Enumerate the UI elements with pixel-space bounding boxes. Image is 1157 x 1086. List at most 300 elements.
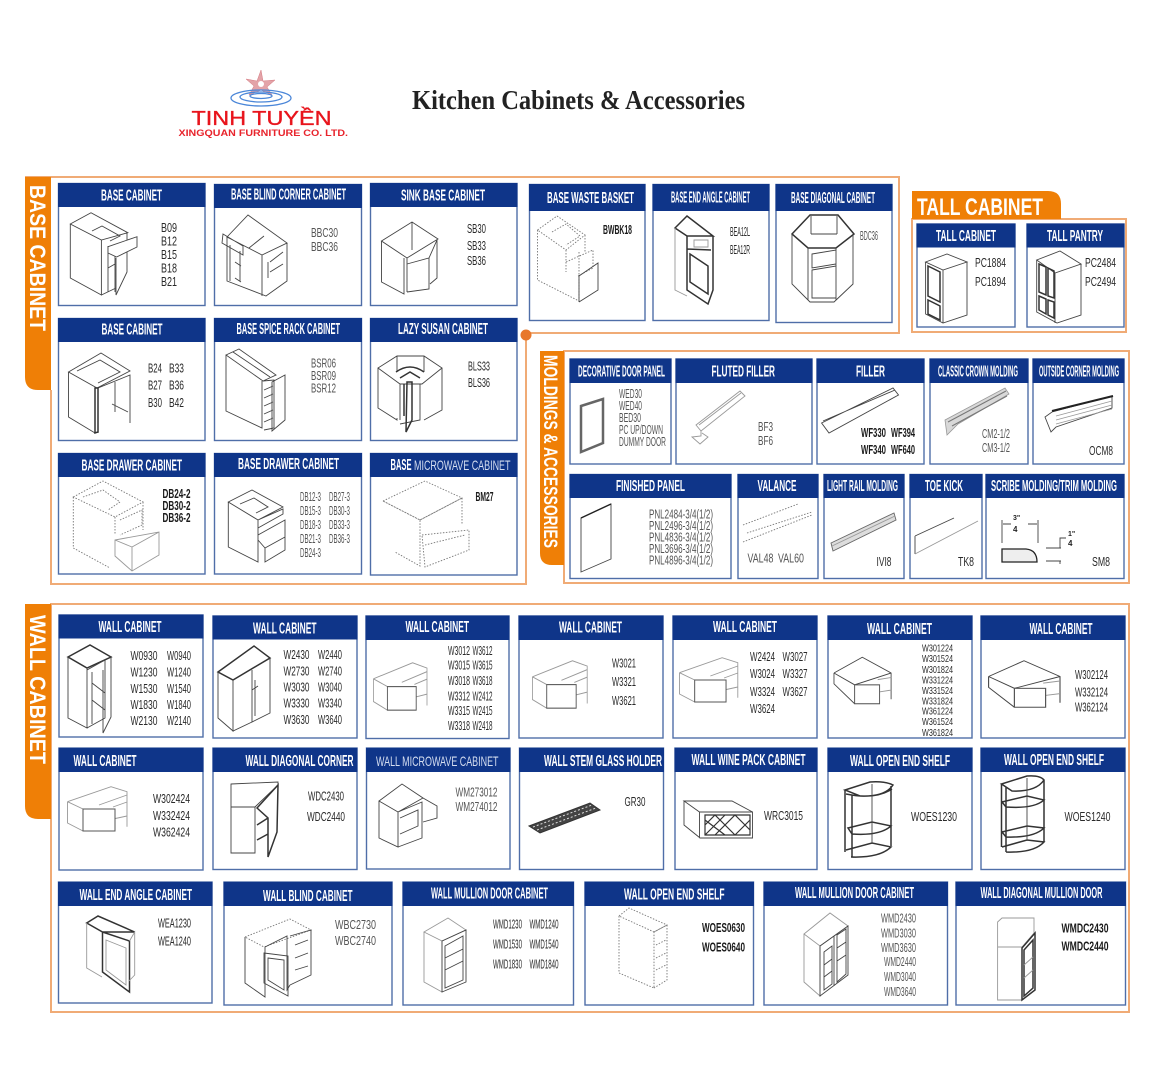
- card: base diagonal cabinet: BDC36: [860, 229, 878, 243]
- header: BASE SPICE RACK CABINET: [236, 321, 340, 338]
- icon: end angle wall cabinet: [87, 916, 135, 992]
- codes: WDC2440: [307, 809, 345, 824]
- codes: SB30: [467, 221, 486, 236]
- card: wall cabinet W301224: [828, 616, 972, 739]
- icon: wall cabinet with closed top: [989, 661, 1060, 707]
- codes: [311, 356, 336, 396]
- icon: pink star: [246, 70, 275, 95]
- codes: W331824: [922, 696, 953, 708]
- header: [980, 616, 1126, 640]
- header: WALL OPEN END SHELF: [850, 753, 950, 770]
- codes: [612, 656, 636, 708]
- icon: base cabinet with drawer: [70, 213, 137, 295]
- header: WALL CABINET: [406, 619, 469, 636]
- codes: [467, 221, 486, 268]
- codes: BSR12: [311, 382, 336, 396]
- codes: PNL2496-3/4(1/2): [649, 519, 713, 533]
- card: classic crown molding: [930, 358, 1028, 464]
- codes: W361224: [922, 706, 953, 718]
- codes: B09: [161, 220, 177, 235]
- header: [570, 474, 732, 498]
- header: LAZY SUSAN CABINET: [398, 321, 488, 338]
- icon: corner molding: [1045, 396, 1113, 432]
- codes: [311, 226, 338, 254]
- card: base waste basket: [529, 184, 646, 320]
- codes left: W3030: [284, 680, 310, 694]
- header: FLUTED FILLER: [712, 364, 775, 380]
- codes: PC2484: [1085, 255, 1116, 270]
- icon: narrow open end shelf: [619, 908, 667, 988]
- card: fluted filler: [676, 358, 812, 464]
- codes: WMD1530: [493, 936, 522, 952]
- header: TALL CABINET: [936, 228, 996, 245]
- codes left: W3315: [448, 703, 470, 718]
- codes: B21: [161, 274, 177, 289]
- icon: door frame: [581, 399, 603, 452]
- code: IVI8: [876, 554, 892, 569]
- codes: PNL3696-3/4(1/2): [649, 542, 713, 556]
- card: base drawer cabinet three drawer: DB27-3: [329, 490, 350, 504]
- icon: light rail: [831, 513, 896, 551]
- panel: moldings and accessories: LIGHT RAIL MOLDING: [827, 478, 898, 495]
- card: wall cabinet W3012: W2412: [472, 688, 492, 704]
- codes right: W0940: [167, 648, 191, 663]
- codes: WBC2740: [335, 934, 376, 948]
- panel: wall cabinet: [25, 604, 1129, 1012]
- icon: double door wall cabinet: [218, 646, 270, 731]
- card: decorative door panel: [570, 358, 672, 464]
- codes left: W1830: [130, 697, 158, 712]
- codes left: W3330: [284, 696, 310, 710]
- codes: BLS36: [468, 375, 490, 390]
- header: WALL BLIND CABINET: [263, 888, 353, 905]
- codes: DUMMY DOOR: [619, 435, 666, 449]
- codes: [748, 552, 804, 566]
- codes: WDC2430: [308, 788, 344, 804]
- codes: WED30: [619, 387, 642, 401]
- header: [370, 318, 518, 342]
- card: wall open end shelf WOES0630: [584, 882, 754, 1005]
- codes: [730, 224, 750, 257]
- card: wall cabinet W3012: W2415: [472, 703, 492, 718]
- icon: crown molding: [945, 388, 1009, 435]
- code: GR30: [624, 794, 646, 809]
- icon: wall cabinet with open door: [532, 661, 587, 708]
- icon: blind wall cabinet: [245, 919, 311, 997]
- icon: filler strip: [822, 388, 898, 433]
- logo: [178, 70, 348, 139]
- codes: WM274012: [456, 800, 498, 814]
- card: base microwave cabinet: [370, 453, 518, 575]
- panel: base cabinet: [25, 177, 899, 584]
- codes: WMDC2440: [1062, 938, 1108, 954]
- codes: WF394: [891, 425, 915, 440]
- codes: WF640: [891, 442, 915, 457]
- icon: open end shelf four levels: [1002, 776, 1044, 852]
- card: wall cabinet W302424: [58, 748, 204, 870]
- codes: WEA1240: [158, 934, 191, 948]
- header: [764, 882, 948, 906]
- header: [584, 882, 754, 906]
- card: wall cabinet W302124: [980, 616, 1126, 738]
- codes: WMD2440: [884, 955, 916, 969]
- section tab: moldings and accessories: MOLDINGS & ACCESSORIES: [539, 355, 560, 548]
- icon: molding profile diagram: 1": [1068, 531, 1075, 538]
- header: WALL CABINET: [559, 620, 622, 636]
- codes: WMDC2430: [1062, 920, 1108, 936]
- card: wall mullion door cabinet WMD1230: WMD1240: [530, 916, 558, 932]
- card: wall open end shelf WOES1240: [980, 748, 1126, 870]
- codes: B36: [169, 378, 184, 392]
- codes left: W1530: [130, 681, 158, 696]
- card: sink base cabinet: [370, 183, 518, 306]
- header: WALL MULLION DOOR CABINET: [431, 886, 548, 902]
- header: [212, 748, 358, 772]
- header: WALL DIAGONAL CORNER: [246, 753, 354, 770]
- header: FINISHED PANEL: [616, 478, 685, 495]
- card: wall cabinet W2424: [672, 616, 818, 738]
- header: [58, 748, 204, 772]
- codes right: W1240: [167, 664, 191, 680]
- header: BASE: [390, 457, 412, 474]
- codes: [161, 220, 177, 289]
- panel: moldings and accessories: DECORATIVE DOOR PANEL: [578, 364, 665, 380]
- codes right: W2140: [167, 713, 191, 728]
- codes left: W3630: [284, 712, 310, 727]
- codes right: W1840: [167, 697, 191, 712]
- card: wall diagonal mullion door: [956, 882, 1126, 1005]
- header: WALL CABINET: [98, 619, 162, 636]
- codes right: [318, 647, 342, 727]
- icon: tall cabinet: [926, 254, 967, 323]
- codes: PNL4896-3/4(1/2): [649, 554, 713, 568]
- codes: BLS33: [468, 358, 490, 374]
- icon: finished panel: [581, 504, 611, 572]
- codes: DB30-2: [162, 498, 190, 513]
- header: [366, 616, 510, 640]
- codes: [619, 387, 666, 449]
- icon: tall wall cabinet: [68, 645, 111, 733]
- panel: tall cabinet: [912, 191, 1126, 332]
- codes: [493, 916, 558, 972]
- codes: PC UP/DOWN: [619, 423, 663, 437]
- card: base diagonal cabinet: [776, 184, 892, 322]
- card: base spice rack cabinet: [214, 318, 362, 440]
- codes left: [448, 643, 470, 733]
- header: VALANCE: [758, 478, 796, 495]
- codes left: W2430: [284, 647, 310, 662]
- codes: [922, 642, 953, 739]
- card: wall stem glass holder: [519, 748, 664, 870]
- header: WALL CABINET: [867, 621, 932, 638]
- codes: CM2-1/2: [982, 427, 1010, 441]
- codes left: W3015: [448, 658, 470, 672]
- logo name: TINH TUYỀN: [192, 107, 332, 130]
- icon: double mullion door cabinet: [804, 913, 848, 996]
- codes: CM3-1/2: [982, 441, 1010, 455]
- panel: moldings and accessories: CLASSIC CROWN MOLDING: [938, 364, 1018, 380]
- codes: WMD1230: [493, 916, 522, 932]
- header: BASE DIAGONAL CABINET: [791, 190, 875, 207]
- header: [828, 748, 972, 772]
- icon: wall diagonal corner cabinet: [231, 782, 278, 857]
- header: SINK BASE CABINET: [401, 188, 485, 204]
- codes: PNL2484-3/4(1/2): [649, 508, 713, 522]
- codes: WMD3030: [881, 926, 916, 940]
- icon: molding profile diagram: 4: [1013, 525, 1018, 534]
- card: base end angle cabinet: BEA12L: [730, 224, 750, 239]
- header: WALL OPEN END SHELF: [624, 886, 724, 904]
- icon: three drawer cabinet: [228, 490, 285, 562]
- card: wall cabinet W3012: W3612: [472, 643, 492, 658]
- codes: W3321: [612, 674, 636, 689]
- card: wall mullion door cabinet WMD1230: WMD1540: [530, 936, 558, 952]
- codes: [158, 916, 191, 948]
- header: TALL PANTRY: [1047, 228, 1103, 245]
- card: base drawer cabinet two drawer: [58, 453, 206, 574]
- codes right: W2440: [318, 647, 342, 662]
- header: [370, 183, 518, 207]
- card: toe kick: [910, 474, 982, 578]
- header: [980, 748, 1126, 772]
- card: wall wine pack cabinet: [674, 748, 818, 870]
- icon: waste basket drawer cabinet: [538, 216, 598, 302]
- codes: W362424: [153, 824, 190, 840]
- header: WALL MICROWAVE CABINET: [376, 753, 499, 769]
- icon: molding profile diagram: 4: [1068, 539, 1073, 548]
- header: [519, 748, 664, 772]
- codes: WMD1830: [493, 956, 522, 972]
- codes: [975, 255, 1006, 289]
- codes: [1085, 255, 1116, 289]
- card: base drawer cabinet three drawer: DB24-3: [300, 546, 321, 560]
- header: [214, 318, 362, 342]
- header: BASE CABINET: [102, 322, 163, 338]
- header: [518, 616, 664, 640]
- codes: W3624: [750, 701, 775, 716]
- card: base drawer cabinet three drawer: DB21-3: [300, 532, 321, 546]
- card: wall cabinet W3012: [366, 616, 510, 738]
- codes: WF340: [861, 442, 886, 457]
- card: wall cabinet W3012: W3615: [472, 658, 492, 672]
- header: BASE DRAWER CABINET: [82, 458, 182, 474]
- codes left: [284, 647, 310, 727]
- codes: WBC2730: [335, 918, 376, 932]
- header: [370, 453, 518, 477]
- codes: WOES0640: [702, 940, 745, 954]
- codes: [307, 788, 345, 824]
- header: BASE WASTE BASKET: [547, 190, 634, 207]
- codes left: [300, 490, 321, 560]
- codes: WMD3630: [881, 941, 916, 955]
- codes: DB36-2: [162, 510, 190, 525]
- codes: W331224: [922, 674, 953, 686]
- card: wall microwave cabinet: [366, 748, 510, 869]
- codes: WOES0630: [702, 920, 745, 935]
- codes: B18: [161, 260, 177, 276]
- header: [58, 882, 212, 906]
- codes: BF6: [758, 434, 773, 448]
- icon: blind corner cabinet: [222, 215, 287, 296]
- codes: [1062, 920, 1108, 954]
- codes: W332124: [1075, 684, 1108, 700]
- header: [224, 882, 392, 906]
- section tab: wall cabinet: WALL CABINET: [25, 615, 50, 764]
- header: WALL END ANGLE CABINET: [80, 887, 192, 904]
- icon: wine rack cabinet: [684, 801, 752, 838]
- icon: wall cabinet with open door: [373, 663, 427, 710]
- codes: [335, 918, 376, 948]
- header: [828, 616, 972, 640]
- header: WALL MULLION DOOR CABINET: [795, 885, 914, 902]
- codes: [702, 920, 745, 954]
- card: base drawer cabinet three drawer: DB36-3: [329, 532, 350, 546]
- codes: W2424: [750, 649, 775, 664]
- codes: B27: [148, 378, 162, 392]
- card: tall pantry: [1026, 224, 1124, 327]
- header: BASE CABINET: [101, 188, 162, 204]
- icon: wall cabinet with open door: [68, 787, 127, 831]
- codes right: W2740: [318, 664, 342, 678]
- codes: BSR06: [311, 356, 336, 370]
- codes: W331524: [922, 685, 953, 697]
- icon: microwave cabinet: [383, 481, 469, 567]
- header: [674, 748, 818, 772]
- icon: end angle cabinet: [675, 216, 713, 304]
- codes: BSR09: [311, 369, 336, 383]
- card: filler: [816, 358, 924, 464]
- codes: WMD2430: [881, 912, 916, 926]
- codes: W3324: [750, 684, 775, 699]
- code: BWBK18: [603, 222, 632, 237]
- card: wall open end shelf WOES1230: [828, 748, 972, 870]
- codes left: W1230: [130, 664, 158, 680]
- icon: two drawer cabinet: [73, 481, 159, 571]
- icon: water ripples: [231, 90, 291, 106]
- header: WALL STEM GLASS HOLDER: [544, 753, 662, 770]
- codes: [456, 786, 498, 814]
- card: scribe molding and trim molding: [986, 474, 1124, 578]
- codes: B30: [148, 395, 162, 410]
- codes right: W3640: [318, 712, 342, 727]
- icon: wall cabinet with open door: [679, 658, 738, 702]
- card: base drawer cabinet three drawer: DB18-3: [300, 518, 321, 532]
- card: base drawer cabinet three drawer: [214, 453, 362, 574]
- card: wall end angle cabinet: [58, 882, 212, 1003]
- codes: B15: [161, 247, 177, 262]
- code: TK8: [958, 554, 974, 569]
- codes: [468, 358, 490, 390]
- codes: [750, 649, 808, 716]
- codes: BED30: [619, 411, 641, 425]
- codes: [1075, 667, 1108, 714]
- card: base drawer cabinet three drawer: DB15-3: [300, 504, 321, 518]
- header: [58, 614, 204, 638]
- header: [58, 453, 206, 477]
- codes: VAL48: [748, 552, 774, 566]
- codes right: [167, 648, 191, 728]
- codes: [649, 508, 713, 568]
- card: base end angle cabinet: BEA12R: [730, 242, 750, 257]
- title: Kitchen Cabinets & Accessories: [412, 85, 745, 115]
- icon: wall cabinet with closed top: [834, 657, 891, 704]
- codes: PC2494: [1085, 274, 1116, 289]
- panel: moldings and accessories: [539, 351, 1129, 583]
- card: outside corner molding: [1032, 358, 1124, 464]
- code: BM27: [476, 489, 494, 504]
- header: [58, 318, 206, 342]
- codes left: W3018: [448, 673, 470, 688]
- card: base drawer cabinet three drawer: DB12-3: [300, 490, 321, 504]
- section tab: base cabinet: BASE CABINET: [25, 185, 50, 331]
- codes: B33: [169, 360, 184, 376]
- codes: BBC30: [311, 226, 338, 240]
- codes: W3327: [782, 666, 808, 681]
- code: WRC3015: [764, 808, 803, 823]
- card: finished panel: [570, 474, 732, 578]
- codes: [148, 360, 184, 410]
- codes: W301224: [922, 642, 953, 654]
- header: WALL CABINET: [1030, 621, 1093, 638]
- header: WALL CABINET: [253, 620, 317, 638]
- card: base blind corner cabinet: [214, 184, 362, 306]
- header: [366, 748, 510, 772]
- icon: mullion door wall cabinet: [424, 918, 466, 992]
- codes: W302424: [153, 791, 190, 806]
- codes: VAL60: [778, 552, 804, 566]
- icon: stem glass rack: [529, 803, 600, 833]
- header: [212, 616, 358, 640]
- card: light rail molding: [824, 474, 904, 578]
- header: [214, 453, 362, 477]
- codes: WMD3040: [884, 970, 916, 984]
- codes: [153, 791, 190, 840]
- header: WALL CABINET: [74, 753, 137, 770]
- codes: B42: [169, 395, 184, 410]
- card: base drawer cabinet three drawer: DB30-3: [329, 504, 350, 518]
- codes left: W0930: [130, 648, 158, 663]
- codes: W301524: [922, 653, 953, 665]
- section tab: tall cabinet: TALL CABINET: [917, 194, 1043, 221]
- codes: PC1884: [975, 255, 1006, 270]
- codes: WED40: [619, 399, 642, 413]
- codes right: [329, 490, 350, 546]
- header: [956, 882, 1126, 906]
- codes: B24: [148, 360, 162, 376]
- codes: [861, 425, 915, 457]
- codes: BF3: [758, 420, 773, 434]
- codes right: W3040: [318, 680, 342, 694]
- codes: DB24-2: [162, 486, 190, 501]
- codes left: W3318: [448, 718, 470, 733]
- header: BASE DRAWER CABINET: [238, 456, 339, 473]
- codes: W3027: [782, 649, 808, 664]
- icon: molding profile diagram: [1002, 515, 1075, 564]
- codes: WMD3640: [884, 985, 916, 999]
- codes: W332424: [153, 808, 190, 823]
- codes: W362124: [1075, 700, 1108, 714]
- icon: spice rack cabinet: [226, 349, 285, 431]
- card: lazy susan cabinet: [370, 318, 518, 440]
- codes: W361524: [922, 716, 953, 728]
- header: MICROWAVE CABINET: [414, 457, 511, 473]
- codes left: [130, 648, 158, 728]
- code: OCM8: [1089, 443, 1113, 458]
- card: wall mullion door cabinet WMD1230: WMD1840: [530, 956, 558, 972]
- icon: fluted filler strip: [692, 391, 745, 444]
- icon: diagonal mullion cabinet: [998, 918, 1035, 1000]
- codes: [881, 912, 916, 999]
